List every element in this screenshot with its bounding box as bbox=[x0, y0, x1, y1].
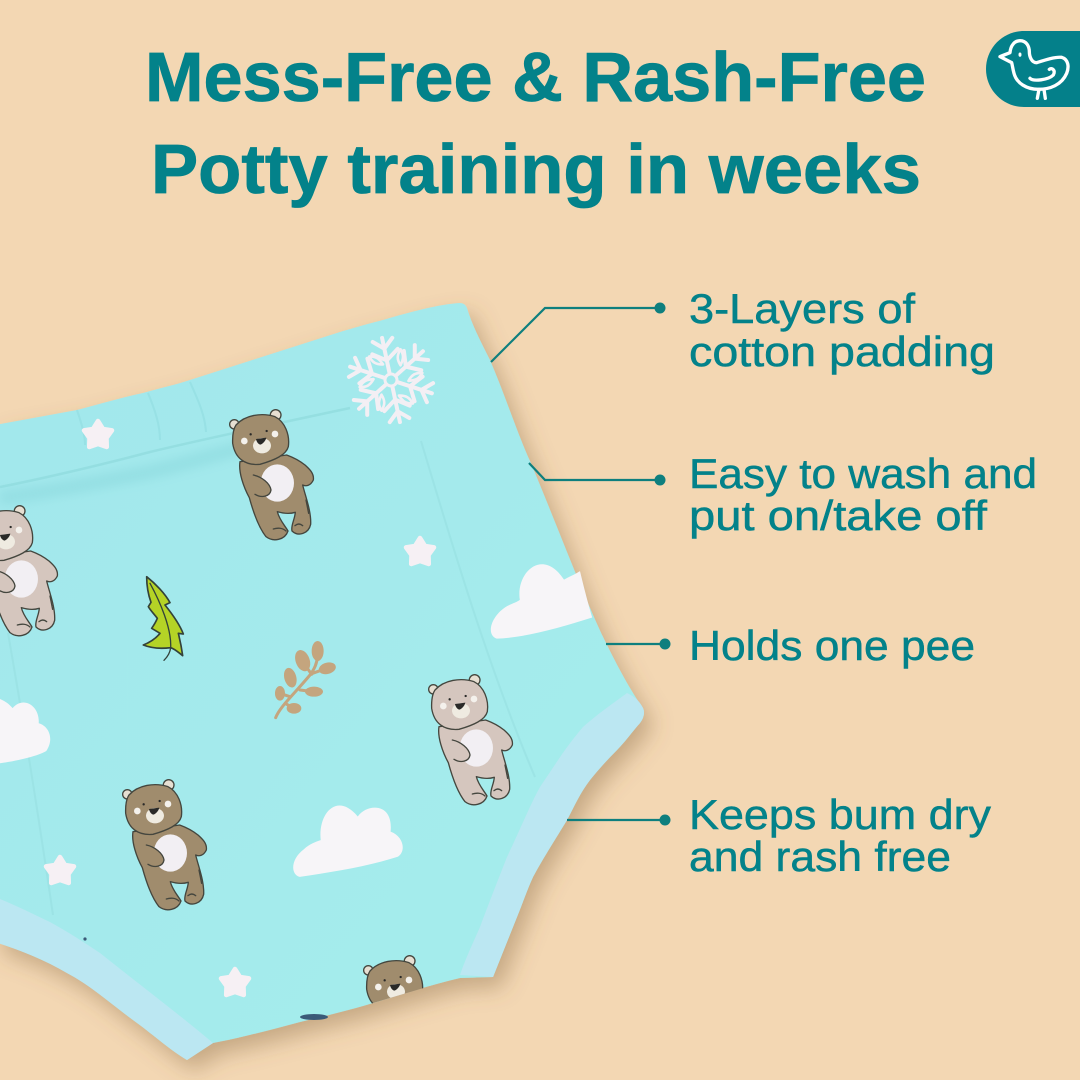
stars bbox=[46, 421, 434, 995]
snowflake bbox=[337, 328, 445, 432]
title: Mess-Free & Rash-Free bbox=[145, 38, 926, 116]
callout: keeps bum dry: Keeps bum dry bbox=[689, 791, 991, 838]
callout: 3-layers of cotton padding bbox=[491, 285, 995, 375]
callout: keeps bum dry bbox=[567, 791, 991, 880]
bear: brown upper bbox=[230, 410, 313, 540]
callout: easy to wash: put on/take off bbox=[689, 492, 987, 539]
leg trim left bbox=[0, 897, 213, 1060]
bear: cropped head at bottom bbox=[363, 955, 424, 1004]
callout: holds one pee: Holds one pee bbox=[689, 622, 975, 669]
title bbox=[145, 38, 926, 208]
clouds bbox=[0, 564, 592, 877]
callout: 3-layers of cotton padding: cotton padding bbox=[689, 328, 995, 375]
callout: 3-layers of cotton padding: 3-Layers of bbox=[689, 285, 915, 332]
callout: keeps bum dry: and rash free bbox=[689, 833, 951, 880]
waistband seam and folds bbox=[0, 382, 535, 915]
bear: brown lower bbox=[123, 780, 206, 910]
tan sprig bbox=[275, 641, 337, 718]
logo badge: bird icon bbox=[986, 31, 1080, 107]
leg trim right bbox=[460, 693, 644, 977]
garment body bbox=[0, 303, 644, 1060]
callout: easy to wash bbox=[529, 450, 1037, 539]
navy detail bbox=[83, 937, 328, 1020]
callout: easy to wash: Easy to wash and bbox=[689, 450, 1037, 497]
training pants illustration bbox=[0, 303, 644, 1080]
bear: pink left bbox=[0, 506, 57, 636]
green leaf bbox=[143, 577, 183, 660]
title: Potty training in weeks bbox=[151, 130, 921, 208]
bear: pink right bbox=[429, 675, 512, 805]
